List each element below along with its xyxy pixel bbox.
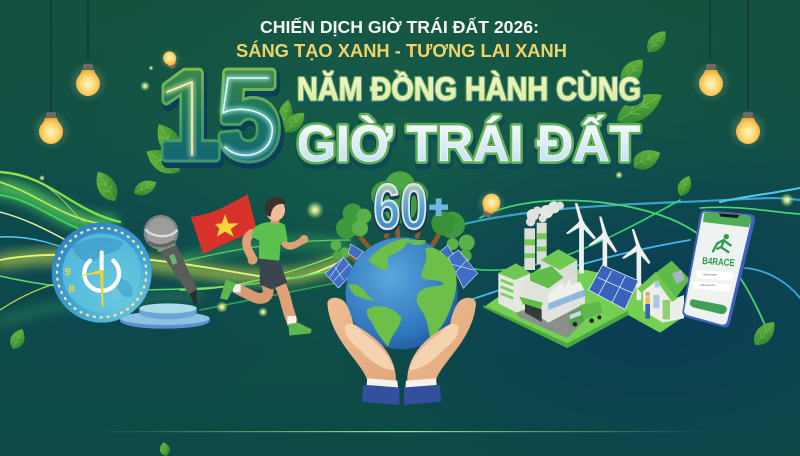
clock — [52, 223, 152, 323]
arms — [246, 233, 253, 259]
worker — [645, 292, 650, 319]
head — [271, 215, 279, 224]
podium — [120, 303, 210, 329]
clock: 8 — [69, 284, 75, 296]
earth — [346, 237, 458, 349]
heading: Earth Hour: GIỜ TRÁI ĐẤT — [298, 118, 641, 176]
microphone — [144, 215, 197, 305]
back leg — [238, 285, 268, 298]
green truck — [568, 302, 603, 327]
phone with app: Username — [703, 272, 717, 276]
sleeves — [362, 378, 441, 405]
clock: 9 — [64, 266, 71, 278]
heading: 15 years together: NĂM ĐỒNG HÀNH CÙNG — [297, 71, 641, 107]
solar panels — [325, 244, 478, 288]
hands — [327, 298, 476, 381]
glowing dots — [39, 66, 794, 317]
hanging light bulbs — [31, 0, 768, 150]
factory buildings — [498, 249, 585, 323]
shorts — [259, 259, 287, 289]
number 60+: + — [429, 190, 448, 224]
shirt — [252, 222, 288, 261]
clock and microphone — [52, 215, 210, 329]
solar array — [589, 265, 638, 309]
heading: 15 years together: NĂM ĐỒNG HÀNH CÙNG — [298, 74, 642, 110]
number 60+: 60 — [373, 173, 427, 243]
heading line 2: SÁNG TẠO XANH - TƯƠNG LAI XANH — [236, 40, 567, 61]
app logo: B4RACE — [702, 256, 735, 269]
phone with app: Password — [701, 283, 715, 287]
chimneys and smoke — [524, 201, 564, 270]
runner — [220, 197, 312, 336]
phone with app — [682, 210, 755, 328]
base platform — [483, 267, 688, 348]
title — [236, 16, 567, 61]
front leg — [279, 283, 292, 320]
heading: 15 years together: NĂM ĐỒNG HÀNH CÙNG — [297, 71, 641, 107]
house — [628, 261, 690, 333]
small bulb right of globe — [472, 185, 510, 223]
heading line 1: CHIẾN DỊCH GIỜ TRÁI ĐẤT 2026: — [260, 16, 539, 37]
heading: Earth Hour: GIỜ TRÁI ĐẤT — [297, 114, 640, 172]
number 15: 15 — [159, 47, 279, 183]
heading: Earth Hour: GIỜ TRÁI ĐẤT — [297, 114, 640, 172]
green factory scene — [483, 201, 755, 348]
energy waves — [0, 172, 800, 325]
globe in hands — [325, 171, 478, 405]
bottom glow line — [90, 431, 710, 432]
trees — [331, 171, 475, 263]
number 15: 15 — [161, 51, 281, 187]
number 60+: 60 — [373, 175, 427, 245]
number 15: 15 — [159, 47, 279, 183]
wind turbines — [566, 203, 650, 300]
Vietnam flag — [191, 194, 257, 254]
